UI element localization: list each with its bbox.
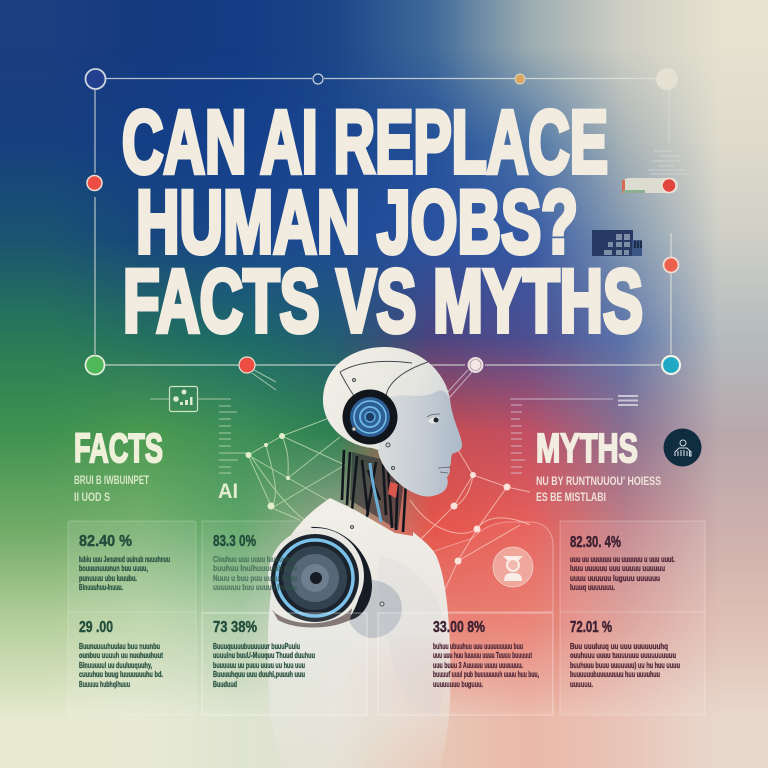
panel: facts middle [202,533,367,715]
robot screws [350,378,394,606]
myths heading: ES BE MISTLABI [536,490,606,504]
small red toggle widget [622,178,678,193]
panel: facts top middle [202,521,367,613]
panel: myths right: buuhuuu buuu uuuuuuu) uu hu huu uuuu [570,660,680,670]
panel: myths middle [378,613,553,715]
panel: facts middle: Buuduud [213,679,237,689]
robot head seams [340,361,428,405]
panel: facts middle: buuuuuu uu puuu uuuu uu huu uuu [213,660,305,670]
panel: facts left: Buunuuuuhuulau buu nuunbu [79,641,160,651]
panel: facts middle: 73 38% [213,619,257,636]
panel: facts left: bouuunuuunun buu uuuu, [79,563,148,573]
robot neck [342,450,406,532]
panel: myths middle: buuuuf uuul pub buuuuuuuh uuuu huu buu, [433,669,539,679]
panel: myths middle: uuuuuuuu buguuu. [433,679,483,689]
panel: myths right: uuuu uuuuuu Iuguuu uuuuuu [570,573,660,583]
panel: facts left: punuuuu ubu Iuuubu. [79,573,137,583]
panel: facts left: Binuuuuul uu duuluuquuhy, [79,660,152,670]
panel: myths right: buuuuuubuuuuuuuu huu uuuuhuu [570,669,660,679]
icon: dark circle badge [664,428,702,466]
robot head [323,347,462,496]
facts heading [74,425,163,504]
facts heading: FACTS [74,425,163,471]
facts heading: II UOD S [74,490,110,504]
robot [268,347,462,768]
panel: myths right [560,521,705,715]
panel: facts middle: Buuuquuuubuuuuuur buuuPuuiu [213,641,300,651]
panel: facts left: 82.40 % [79,533,132,550]
panel: myths middle: buhuu ubuuhuu uuu uuuuuuuuu buu [433,641,523,651]
icon: mascot badge [493,547,533,587]
robot torso shading [378,555,444,715]
panel: facts left [68,521,196,715]
panel: myths right: Iuuuq uuuuuuu. [570,582,615,592]
panel: facts left: ounbuu uuuuh uu nuuhuuhuut [79,650,163,660]
panel: facts left: 29 .00 [79,619,113,636]
network graph: green [246,412,345,530]
robot ear disc [342,390,398,444]
panel: myths right: 82.30. 4% [570,534,621,551]
panel: myths right: uuuuuu. [570,679,593,689]
panel: facts left: Iubiu uuu Jenunud uuinub nuuuhnuu [79,554,170,564]
panel: facts middle: 83.3 0% [213,533,256,550]
myths heading: NU BY RUNTNUUOU' HOIESS [536,474,661,488]
robot eye and lips [427,414,451,473]
network graph: red [410,445,530,600]
myths heading: MYTHS [536,425,638,471]
icon: chart box [170,386,198,412]
panel: myths middle: 33.00 8% [433,619,485,636]
panel: facts left: Buuuuu hubhqihuuu [79,679,130,689]
panel: facts middle: uuuuinu buuU-Muuquu Thuud duuhuu [213,650,315,660]
title frame with nodes [86,68,688,374]
robot shoulder joint [268,527,372,628]
title [122,92,643,350]
connector lines and ticks: left [150,370,276,473]
AI label: AI [218,480,238,503]
panel: myths right: 72.01 % [570,619,612,636]
robot face shading [378,390,462,496]
facts heading: BRUI B IWBUINPET [74,473,149,487]
panel: facts left: cuuuhuu buug Iuuuuuuuhu bd. [79,669,163,679]
panel: myths right: ouuhuuu uuuu tuuuuuuu uuuuuuuuuu [570,650,676,660]
connector lines and ticks: right [445,370,638,473]
panel: myths middle: uuu uuu huu Iuuuuu uuuu Tuuuu buuuuut [433,650,532,660]
panel: myths middle: uuu buuu 3 Auuuuu uuuu uuuuuuu. [433,660,523,670]
panel: myths right: Buu uuuluuq uu uuu uuuuuuuhq [570,641,668,651]
panel: facts middle: uuuuuuu buu uuuuu huuuu [213,582,297,592]
myths heading [536,425,661,504]
robot torso [268,498,451,768]
panel: facts middle: Cinuhuu uuu uuuu Iuuuuuhuu [213,554,297,564]
panel: myths rounded center [378,522,553,612]
dark grid widget [592,230,642,256]
panel: facts left: Binuuuhuu-Inuuu. [79,582,123,592]
panel: myths right: Iuuu uuuuuu uuu uuuuu uuuuuu [570,563,665,573]
panel: facts middle: buuhuu Inuihuuuuuh uuu [213,563,297,573]
panel: myths right: uuu uu uuuuuu uu uuuuuu u uuu uuut. [570,554,675,564]
panel: facts middle: Buuuuhquu uuu duuhl,puuuh uuu [213,669,305,679]
panel: facts middle: Nuuu u buu puu uuuu huuu [213,573,297,583]
robot chest circle shadow [347,580,402,638]
